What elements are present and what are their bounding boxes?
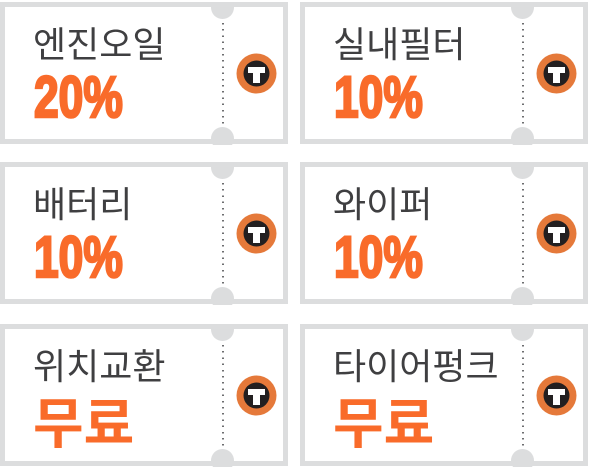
icon: T logo: [236, 376, 276, 416]
icon: T logo: [536, 214, 576, 254]
icon: T logo: [536, 376, 576, 416]
value: 20%: 20%: [34, 65, 123, 130]
ticket: tire rotation: [0, 324, 288, 467]
ticket: tire puncture: [300, 324, 588, 467]
value: 10%: 10%: [334, 225, 423, 290]
label: battery: 배터리: [33, 176, 132, 228]
label: engine oil: 엔진오일: [33, 16, 165, 68]
ticket: engine oil: [0, 2, 288, 145]
ticket: wiper: [300, 162, 588, 305]
ticket: battery: [0, 162, 288, 305]
icon: T logo: [536, 54, 576, 94]
icon: T logo: [236, 214, 276, 254]
label: tire puncture: 타이어펑크: [333, 338, 499, 390]
ticket: cabin filter: [300, 2, 588, 145]
label: cabin filter: 실내필터: [333, 16, 465, 68]
icon: T logo: [236, 54, 276, 94]
value: 10%: 10%: [34, 225, 123, 290]
value: free: 무료: [33, 379, 134, 459]
value: free: 무료: [333, 379, 434, 459]
value: 10%: 10%: [334, 65, 423, 130]
label: tire rotation: 위치교환: [33, 338, 165, 390]
label: wiper: 와이퍼: [333, 176, 432, 228]
